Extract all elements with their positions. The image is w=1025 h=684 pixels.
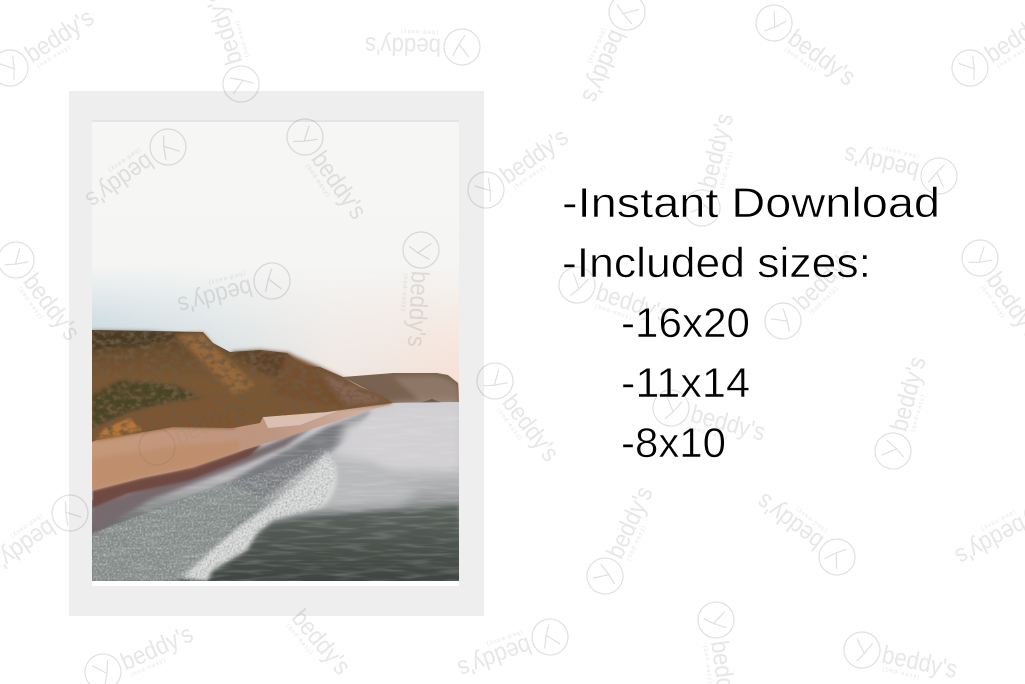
watermark: beddy's <box>365 31 441 61</box>
dark open water <box>262 503 459 534</box>
watermark <box>280 112 375 227</box>
watermark: (bed-easy) <box>690 426 728 442</box>
sea <box>92 402 459 581</box>
watermark: (bed-easy) <box>979 508 1016 532</box>
watermark <box>470 356 568 469</box>
watermark: beddy's <box>20 3 99 68</box>
watermark <box>841 629 961 684</box>
beach <box>92 403 395 490</box>
watermark <box>871 353 935 473</box>
watermark: (bed-easy) <box>234 19 251 58</box>
watermark: (bed-easy) <box>626 524 648 562</box>
watermark: beddy's <box>841 141 922 185</box>
watermark: (bed-easy) <box>400 28 438 35</box>
watermark <box>749 484 862 582</box>
light water upper right <box>335 404 459 470</box>
watermark: beddy's <box>81 148 159 214</box>
watermark: (bed-easy) <box>794 505 829 533</box>
watermark: (bed-easy) <box>37 44 72 70</box>
near-shore grey water <box>92 410 372 581</box>
line: instant download: -Instant Download <box>562 179 940 226</box>
foam streak <box>180 452 337 581</box>
watermark <box>955 233 1025 348</box>
watermark <box>749 0 863 95</box>
watermark: beddy's <box>116 620 197 676</box>
watermark: beddy's <box>788 243 861 316</box>
watermark: beddy's <box>693 110 739 191</box>
watermark: (bed-easy) <box>881 144 920 159</box>
watermark: (bed-easy) <box>882 667 921 681</box>
watermark: beddy's <box>17 268 86 346</box>
watermark: (bed-easy) <box>8 512 43 539</box>
distant headland <box>343 373 459 406</box>
watermark: beddy's <box>170 393 251 451</box>
watermark: (bed-easy) <box>594 304 633 321</box>
watermark: (bed-easy) <box>16 286 44 321</box>
watermark <box>680 110 743 230</box>
watermark: beddy's <box>576 26 632 107</box>
watermark: (bed-easy) <box>106 146 141 173</box>
watermark: (bed-easy) <box>495 407 523 442</box>
watermark: beddy's <box>751 487 829 556</box>
watermark: beddy's <box>306 146 372 224</box>
watermark <box>758 240 864 346</box>
watermark: (bed-easy) <box>485 628 523 647</box>
watermark: (bed-easy) <box>304 164 331 199</box>
foam speckle <box>92 448 335 581</box>
watermark <box>133 390 253 471</box>
sky <box>92 122 459 412</box>
watermark <box>453 614 573 684</box>
watermark: (bed-easy) <box>808 285 840 317</box>
watermark <box>554 262 675 332</box>
photo: coastal cliffs and sea <box>92 122 459 581</box>
watermark <box>581 480 662 600</box>
line: included sizes: -Included sizes: <box>562 239 871 286</box>
watermark: beddy's <box>495 123 573 189</box>
watermark: (bed-easy) <box>130 657 168 679</box>
watermark <box>0 235 89 348</box>
watermark: beddy's <box>885 354 932 434</box>
watermark <box>398 231 440 348</box>
watermark <box>649 386 769 450</box>
watermark: beddy's <box>496 389 565 467</box>
watermark <box>0 488 95 583</box>
watermark: (bed-easy) <box>719 150 735 189</box>
watermark <box>0 0 101 93</box>
cliffs <box>92 330 393 442</box>
watermark: beddy's <box>175 273 255 320</box>
watermark: (bed-easy) <box>207 270 246 286</box>
watermark: (bed-easy) <box>586 27 607 65</box>
watermark: (bed-easy) <box>513 164 548 191</box>
watermark <box>365 27 480 65</box>
watermark <box>79 616 199 684</box>
watermark: beddy's <box>402 270 434 348</box>
watermark: beddy's <box>688 400 768 447</box>
watermark <box>949 489 1025 574</box>
watermark: (bed-easy) <box>702 645 713 684</box>
watermark: (bed-easy) <box>285 623 314 657</box>
line: size 11x14: -11x14 <box>621 359 750 406</box>
line: size 8x10: -8x10 <box>621 419 726 466</box>
product details text <box>562 179 940 466</box>
watermark: (bed-easy) <box>979 285 1006 320</box>
watermark <box>840 137 961 198</box>
watermark: beddy's <box>593 278 674 328</box>
picture frame <box>69 91 484 616</box>
watermark <box>573 0 651 108</box>
watermark <box>461 120 576 215</box>
soft surf right of the streak <box>300 455 420 510</box>
left foam band <box>92 483 262 581</box>
line: size 16x20: -16x20 <box>621 299 750 346</box>
watermark: (bed-easy) <box>783 47 818 74</box>
watermark <box>945 0 1025 93</box>
watermark: (bed-easy) <box>911 394 927 432</box>
watermark <box>195 0 263 106</box>
watermark <box>696 600 747 684</box>
watermark <box>78 122 193 217</box>
watermark <box>174 259 294 323</box>
wet sand <box>92 425 315 535</box>
watermark: beddy's <box>601 482 659 563</box>
watermark: (bed-easy) <box>400 273 408 312</box>
watermark: beddy's <box>783 24 861 91</box>
